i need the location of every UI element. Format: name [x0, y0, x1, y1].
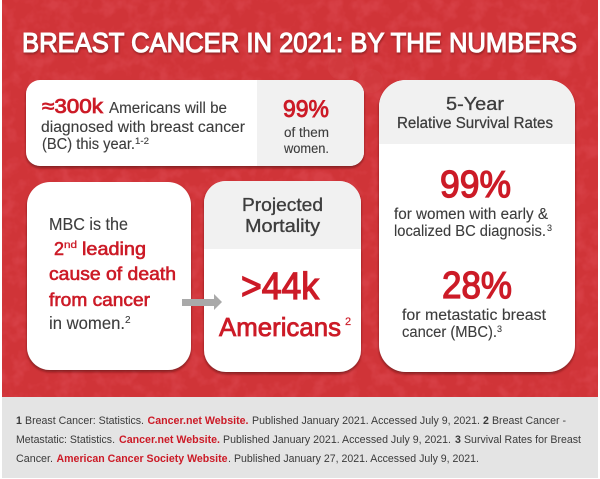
text: early and localized: 3	[547, 223, 552, 233]
text: metastatic breast cancer: 3	[497, 324, 502, 334]
footer references: Breast Cancer: Statistics.	[25, 415, 144, 427]
text: diagnosed description: 1-2	[135, 136, 149, 146]
footer references: Published January 2021. Accessed July 9, 2021.	[223, 434, 451, 446]
stat: 99 percent early: 99%	[440, 164, 511, 206]
text: of them women	[283, 125, 329, 156]
panel header: Projected	[242, 194, 323, 215]
text: early and localized: for women with early &	[394, 206, 549, 223]
text: metastatic breast cancer: cancer (MBC).	[402, 324, 497, 341]
stat: over 44k: >44k	[241, 266, 320, 308]
stat: 99 percent: 99%	[283, 96, 329, 123]
panel header	[204, 181, 361, 249]
panel: diagnoses	[26, 80, 364, 166]
panel header: 5-Year	[446, 93, 504, 114]
text: 2nd leading cause of death from cancer	[49, 239, 176, 310]
text: 2nd leading cause of death from cancer: cause of death	[49, 264, 176, 284]
footer references: Metastatic: Statistics.	[16, 434, 115, 446]
footer references: 3	[455, 434, 461, 446]
footer references: Breast Cancer -	[492, 415, 566, 427]
arrow: MBC to mortality	[182, 294, 222, 310]
footer references: 2	[483, 415, 489, 427]
footer background	[2, 397, 598, 478]
footer references: Published January 2021. Accessed July 9, 2021.	[252, 415, 480, 427]
text: early and localized	[394, 206, 552, 240]
footer references	[16, 415, 581, 465]
text: MBC is the: MBC is the	[49, 214, 128, 234]
text: diagnosed description: Americans will be	[109, 100, 227, 117]
text: 2nd leading cause of death from cancer: 2	[54, 239, 64, 259]
text: in women: in women.	[49, 313, 125, 333]
text: 2nd leading cause of death from cancer: nd	[64, 240, 77, 251]
text: diagnosed description: (BC) this year.	[42, 136, 135, 153]
panel header: Relative Survival Rates	[397, 115, 553, 132]
text: metastatic breast cancer: for metastatic breast	[402, 307, 547, 324]
text: diagnosed description	[41, 100, 245, 153]
panel: projected mortality	[204, 181, 361, 372]
text: Americans: Americans	[219, 312, 341, 342]
footer references: American Cancer Society Website	[56, 453, 228, 465]
text: diagnosed description: diagnosed with breast cancer	[41, 119, 245, 136]
footer references: Cancer.net Website.	[119, 434, 220, 446]
text: of them women: women.	[283, 141, 329, 156]
stat: about 300k: ≈300k	[42, 95, 104, 118]
panel header: Mortality	[245, 215, 321, 236]
footer references: Published January 27, 2021. Accessed July 9, 2021.	[234, 453, 479, 465]
footer references: Cancer.net Website.	[148, 415, 249, 427]
footer references: Survival Rates for Breast	[464, 434, 581, 446]
panel: 5-year relative survival rates	[379, 80, 575, 372]
text: of them women: of them	[284, 125, 329, 140]
text: metastatic breast cancer	[402, 307, 547, 341]
footer references: Cancer.	[16, 453, 53, 465]
footer references: 1	[16, 415, 22, 427]
text: in women: 2	[125, 315, 131, 326]
panel section: 99 percent of them women	[257, 80, 364, 166]
panel: MBC second leading cause	[27, 182, 191, 370]
footer references: .	[228, 453, 231, 465]
stat: 28 percent metastatic: 28%	[442, 265, 512, 307]
text: Americans: 2	[345, 316, 351, 328]
panel header	[379, 80, 575, 144]
text: 2nd leading cause of death from cancer: from cancer	[49, 290, 150, 310]
text: early and localized: localized BC diagnosis.	[394, 223, 546, 240]
text: 2nd leading cause of death from cancer: leading	[82, 239, 146, 259]
